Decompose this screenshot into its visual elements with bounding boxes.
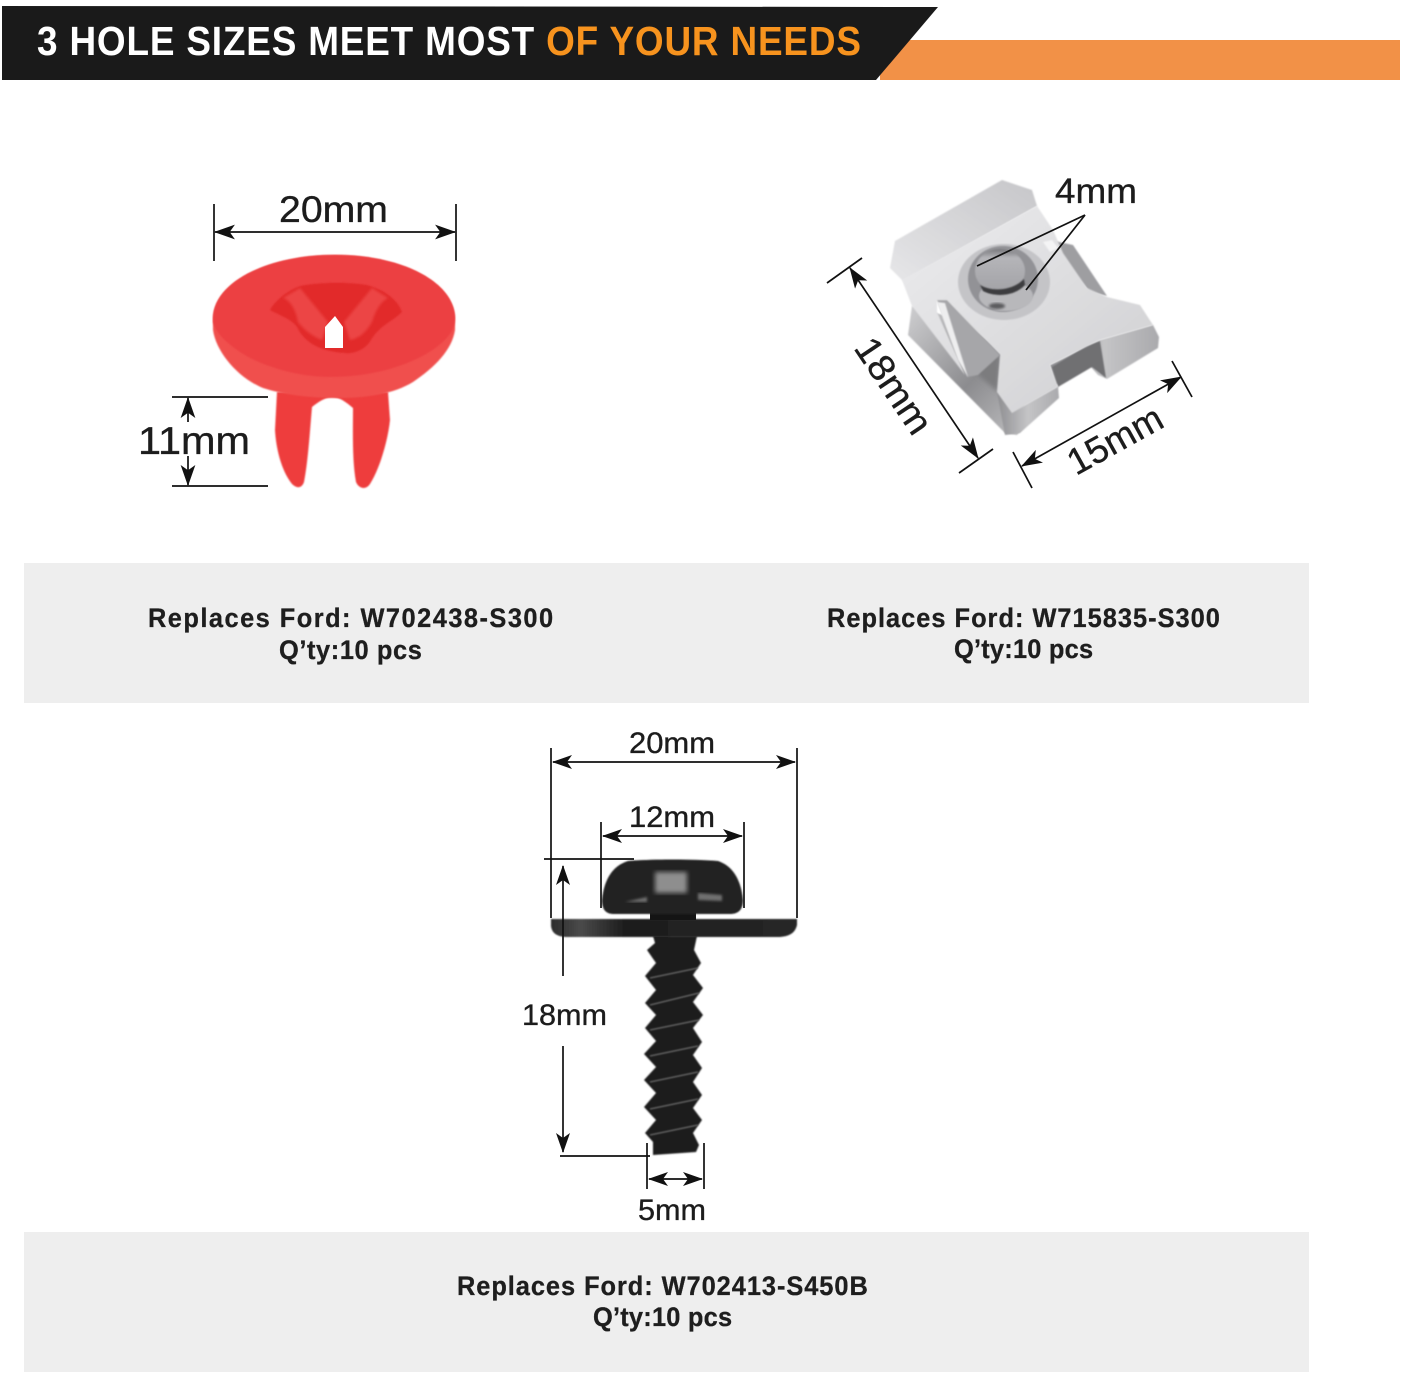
black banner shape [2,6,938,80]
orange bar [880,40,1400,80]
dimension: screw 18mm: 18mm [522,999,607,1032]
dimension: 18mm [827,258,993,473]
red clip head [213,255,455,398]
wall inner shadow [970,335,1000,392]
caption: red clip [148,602,553,665]
ring lower wall [979,281,1033,311]
screw washer [551,919,797,937]
screw neck [650,910,696,920]
dimension: 11mm [138,397,268,486]
red clip top face [213,255,455,377]
dimension: 20mm: 20mm [279,189,388,230]
dimension: 15mm [1013,361,1192,488]
caption: red clip: Replaces Ford: W702438-S300 [148,602,553,633]
caption: red clip: Q’ty:10 pcs [279,634,422,665]
wall dark spot [989,303,1005,309]
dimension: 18mm: 18mm [846,330,941,442]
product: red clip with dimensions [138,189,456,488]
screw shaft with threads [644,936,703,1155]
nut front tab [997,386,1059,435]
dimension: screw 5mm [638,1143,706,1227]
head side glints [625,893,722,902]
dimension: screw 12mm: 12mm [629,801,715,834]
dimension: 15mm: 15mm [1060,397,1170,483]
nut main plate [902,206,1153,413]
dimension: 4mm: 4mm [1055,172,1137,211]
head highlight [655,872,687,893]
nut right prong [1050,240,1107,296]
header banner [2,6,1400,80]
caption: metal nut [827,602,1220,664]
nut raised ring [958,244,1050,320]
nut right tab [1050,325,1159,385]
recess highlights [283,288,388,340]
title: 3 HOLE SIZES MEET MOST OF YOUR NEEDS [37,19,861,64]
red clip legs [275,392,390,488]
product: black screw with dimensions [522,727,797,1227]
nut back flap [890,180,1037,281]
thread highlights [650,968,699,1135]
red clip recess [270,283,402,353]
caption panel: screw [24,1232,1309,1372]
screw head [602,860,743,914]
dimension: 11mm: 11mm [138,420,250,463]
dimension: screw 5mm: 5mm [638,1194,706,1227]
caption panel: screw: Q’ty:10 pcs [593,1301,732,1332]
caption panel: first row [24,563,1309,703]
caption: metal nut: Q’ty:10 pcs [954,633,1093,664]
nut hole [975,249,1025,293]
caption: metal nut: Replaces Ford: W715835-S300 [827,602,1220,633]
dimension: 4mm [977,172,1137,290]
product: metal clip nut with dimensions [827,172,1192,488]
nut left prong [937,300,1000,377]
center slot [325,316,343,348]
hole crescent shadow [980,279,1025,295]
nut left side wall [908,306,1030,435]
dimension: screw 20mm: 20mm [629,727,715,760]
caption panel: screw: Replaces Ford: W702413-S450B [457,1270,868,1301]
nut notch [1052,341,1106,387]
plate slot highlight [1043,240,1058,252]
